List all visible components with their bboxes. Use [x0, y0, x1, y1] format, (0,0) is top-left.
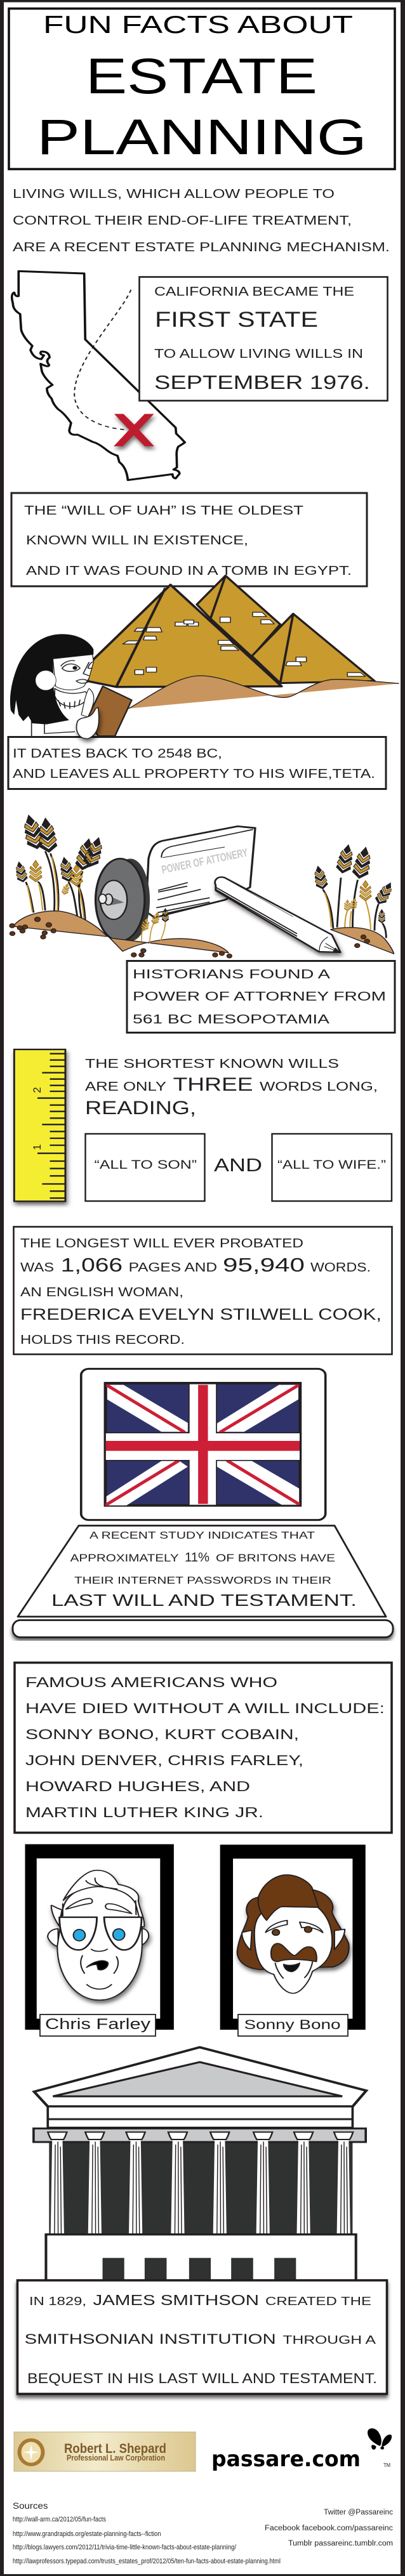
panel: longest will: FREDERICA EVELYN STILWELL COOK,: [20, 1306, 382, 1324]
hair: [10, 634, 93, 725]
panel: historians: 561 BC MESOPOTAMIA: [133, 1012, 329, 1027]
text: shortest wills: ARE ONLY: [85, 1080, 166, 1094]
panel: dates back: IT DATES BACK TO 2548 BC,: [13, 747, 222, 761]
left wheat cluster: [13, 813, 107, 920]
earring disc: [36, 671, 56, 690]
panel: famous americans: SONNY BONO, KURT COBAIN,: [25, 1726, 299, 1742]
monitor stand panel with britons text: A RECENT STUDY INDICATES THAT: [90, 1530, 315, 1541]
torso lines: [32, 721, 75, 736]
butterfly mark: [368, 2428, 392, 2450]
intro text: LIVING WILLS, WHICH ALLOW PEOPLE TO: [13, 187, 335, 201]
title line: fun facts about: FUN FACTS ABOUT: [43, 11, 353, 39]
portrait: chris farley: [25, 1844, 174, 2030]
callout: california first state: CALIFORNIA BECAME THE: [154, 285, 354, 299]
facial features: [61, 660, 93, 683]
panel: longest will: 1,066: [61, 1254, 123, 1276]
scroll inner: [100, 881, 127, 919]
callout: california first state: SEPTEMBER 1976.: [154, 371, 370, 393]
social links: Twitter @Passareinc: [324, 2509, 393, 2516]
illustration: pyramids: [88, 575, 399, 709]
monitor stand panel with britons text: LAST WILL AND TESTAMENT.: [51, 1592, 357, 1610]
sources list: http://www.grandrapids.org/estate-planning-facts--fiction: [13, 2530, 161, 2538]
social links: [265, 2509, 393, 2547]
monitor stand panel with britons text: OF BRITONS HAVE: [216, 1553, 335, 1564]
panel: famous americans: HAVE DIED WITHOUT A WILL INCLUDE:: [25, 1700, 385, 1716]
dune outline: [129, 676, 399, 709]
social links: Tumblr passareinc.tumblr.com: [288, 2540, 393, 2547]
panel: james smithson: SMITHSONIAN INSTITUTION: [25, 2331, 276, 2347]
entablature: [48, 2106, 352, 2127]
word: and: AND: [214, 1155, 262, 1176]
center wheat: [140, 908, 169, 943]
panel: historians: POWER OF ATTORNEY FROM: [133, 989, 386, 1004]
panel: will of uah: [11, 493, 367, 586]
panel: james smithson: THROUGH A: [283, 2333, 376, 2346]
intro text: [13, 187, 390, 254]
logo: passare.com: [211, 2428, 392, 2472]
torso: [32, 687, 101, 736]
ruler number 1: 1: [31, 1144, 43, 1150]
panel: dates back: [8, 737, 386, 789]
illustration: egyptian woman reading a will: [10, 634, 132, 739]
panel: longest will: PAGES AND: [129, 1261, 217, 1275]
panel: famous americans: [15, 1662, 392, 1832]
logo: robert l. shepard: [14, 2432, 196, 2471]
face: [48, 1870, 149, 2000]
logo: passare.com: passare.com: [211, 2447, 361, 2472]
brown tablet: [86, 687, 132, 736]
panel: famous americans: HOWARD HUGHES, AND: [25, 1778, 250, 1794]
ruler body: [14, 1049, 65, 1201]
portrait frame: [25, 1844, 174, 2030]
quote box: all to wife: “ALL TO WIFE.”: [277, 1159, 386, 1172]
portrait frame: [220, 1844, 366, 2030]
icon: computer monitor with union jack: [81, 1369, 326, 1520]
document fold and lines: [156, 829, 253, 914]
panel: james smithson: BEQUEST IN HIS LAST WILL AND TESTAMENT.: [27, 2370, 377, 2386]
logo emblem: [18, 2438, 44, 2466]
title line: planning: PLANNING: [37, 108, 367, 165]
sources list: [13, 2501, 281, 2565]
red x marker: [114, 414, 154, 446]
title line: estate: ESTATE: [86, 48, 317, 104]
temple steps: [103, 2258, 296, 2280]
social links: Facebook facebook.com/passareinc: [265, 2525, 393, 2532]
panel: james smithson: JAMES SMITHSON: [93, 2292, 259, 2308]
quote box: all to son: [85, 1134, 204, 1201]
monitor stand panel with britons text: 11%: [185, 1550, 209, 1565]
callout: california first state: TO ALLOW LIVING WILLS IN: [154, 347, 363, 361]
name label: sonny bono: Sonny Bono: [244, 2018, 340, 2032]
scroll roll front: [96, 858, 145, 941]
panel: historians: HISTORIANS FOUND A: [133, 967, 330, 982]
monitor stand panel with britons text: THEIR INTERNET PASSWORDS IN THEIR: [74, 1575, 331, 1586]
face: [237, 1875, 349, 1994]
text: shortest wills: THREE: [173, 1074, 253, 1095]
quote box: all to wife: [272, 1134, 392, 1201]
soil pebbles: [10, 917, 369, 958]
pencil: [215, 877, 340, 952]
logo: passare.com: TM: [383, 2462, 390, 2468]
panel: longest will: 95,940: [223, 1254, 305, 1276]
name label: chris farley: [40, 2014, 156, 2036]
union jack flag: [105, 1383, 300, 1506]
ruler ticks: [37, 1054, 65, 1198]
back pyramid: [197, 575, 280, 657]
panel: longest will: HOLDS THIS RECORD.: [20, 1333, 185, 1347]
sources list: http://lawprofessors.typepad.com/trusts_estates_prof/2012/05/ten-fun-facts-about-estate-planning.html: [13, 2558, 281, 2565]
monitor stand panel with britons text: APPROXIMATELY: [70, 1553, 179, 1564]
sand dunes: [129, 676, 399, 709]
icon: yellow ruler: [14, 1049, 65, 1201]
intro text: ARE A RECENT ESTATE PLANNING MECHANISM.: [13, 240, 390, 254]
right soil mound: [331, 928, 394, 954]
panel: dates back: AND LEAVES ALL PROPERTY TO HIS WIFE,TETA.: [13, 767, 375, 781]
panel: historians: [127, 961, 395, 1033]
text: shortest wills: THE SHORTEST KNOWN WILLS: [85, 1057, 339, 1071]
sources list: http://wall-arm.ca/2012/05/fun-facts: [13, 2516, 106, 2523]
portrait: sonny bono: [220, 1844, 366, 2030]
pyramid stone blocks: [123, 612, 366, 676]
panel: james smithson: CREATED THE: [265, 2294, 371, 2308]
panel: longest will: THE LONGEST WILL EVER PROBATED: [20, 1237, 303, 1251]
front pyramid: [88, 585, 282, 687]
monitor stand base: [13, 1620, 393, 1637]
panel: famous americans: MARTIN LUTHER KING JR.: [25, 1804, 263, 1820]
raised fingers: [81, 688, 94, 717]
illustration: power of attorney scroll in wheat field: [10, 813, 396, 958]
panel: will of uah: AND IT WAS FOUND IN A TOMB IN EGYPT.: [26, 564, 352, 578]
right pyramid: [252, 614, 375, 683]
title panel: [9, 9, 395, 169]
document: [146, 826, 255, 918]
name label: sonny bono: [238, 2014, 348, 2036]
panel: longest will: WAS: [20, 1261, 54, 1275]
panel: longest will: WORDS.: [310, 1261, 371, 1275]
pediment: [34, 2047, 366, 2106]
hand: [77, 707, 99, 739]
scroll roll back: [111, 858, 150, 941]
face: [53, 655, 93, 690]
panel: will of uah: KNOWN WILL IN EXISTENCE,: [26, 534, 248, 548]
dashed route: [74, 290, 131, 430]
california outline: [12, 271, 185, 480]
document heading line: [163, 847, 225, 858]
panel: will of uah: THE “WILL OF UAH” IS THE OLDEST: [24, 504, 303, 518]
quote box: all to son: “ALL TO SON”: [94, 1159, 197, 1172]
left soil mound: [13, 911, 107, 936]
text: shortest wills: READING,: [85, 1098, 196, 1119]
text: shortest wills: [85, 1057, 378, 1119]
panel: longest will: [14, 1227, 392, 1354]
illustration: smithsonian temple: [34, 2047, 366, 2281]
document heading text: POWER OF ATTONERY: [161, 846, 249, 876]
icon: california map with marker: [12, 271, 185, 480]
intro text: CONTROL THEIR END-OF-LIFE TREATMENT,: [13, 214, 352, 228]
scroll spindle: [98, 894, 124, 905]
callout: california first state: FIRST STATE: [155, 308, 318, 332]
panel: james smithson: [18, 2280, 387, 2394]
panel: famous americans: FAMOUS AMERICANS WHO: [25, 1674, 277, 1690]
logo: robert l. shepard: Professional Law Corporation: [67, 2454, 165, 2462]
callout: california first state: [140, 277, 387, 401]
sources list: Sources: [13, 2501, 48, 2511]
pediment inner: [53, 2062, 342, 2096]
panel: famous americans: JOHN DENVER, CHRIS FARLEY,: [25, 1752, 303, 1768]
collar: [55, 688, 89, 709]
right wheat cluster: [312, 843, 396, 938]
gray frieze band: [34, 2129, 366, 2142]
ruler number 2: 2: [31, 1087, 43, 1093]
monitor frame: [81, 1369, 326, 1520]
text: shortest wills: WORDS LONG,: [260, 1080, 378, 1094]
columns: [48, 2132, 353, 2233]
monitor stand panel with britons text: [18, 1525, 386, 1617]
sources list: http://blogs.lawyers.com/2012/11/trivia-time-little-known-facts-about-estate-planning/: [13, 2544, 237, 2551]
panel: longest will: AN ENGLISH WOMAN,: [20, 1285, 183, 1299]
center soil mound: [110, 938, 229, 953]
name label: chris farley: Chris Farley: [45, 2016, 150, 2033]
temple base: [46, 2235, 356, 2281]
colonnade background: [49, 2142, 352, 2235]
panel: james smithson: IN 1829,: [29, 2294, 86, 2308]
logo: robert l. shepard: Robert L. Shepard: [64, 2441, 166, 2456]
